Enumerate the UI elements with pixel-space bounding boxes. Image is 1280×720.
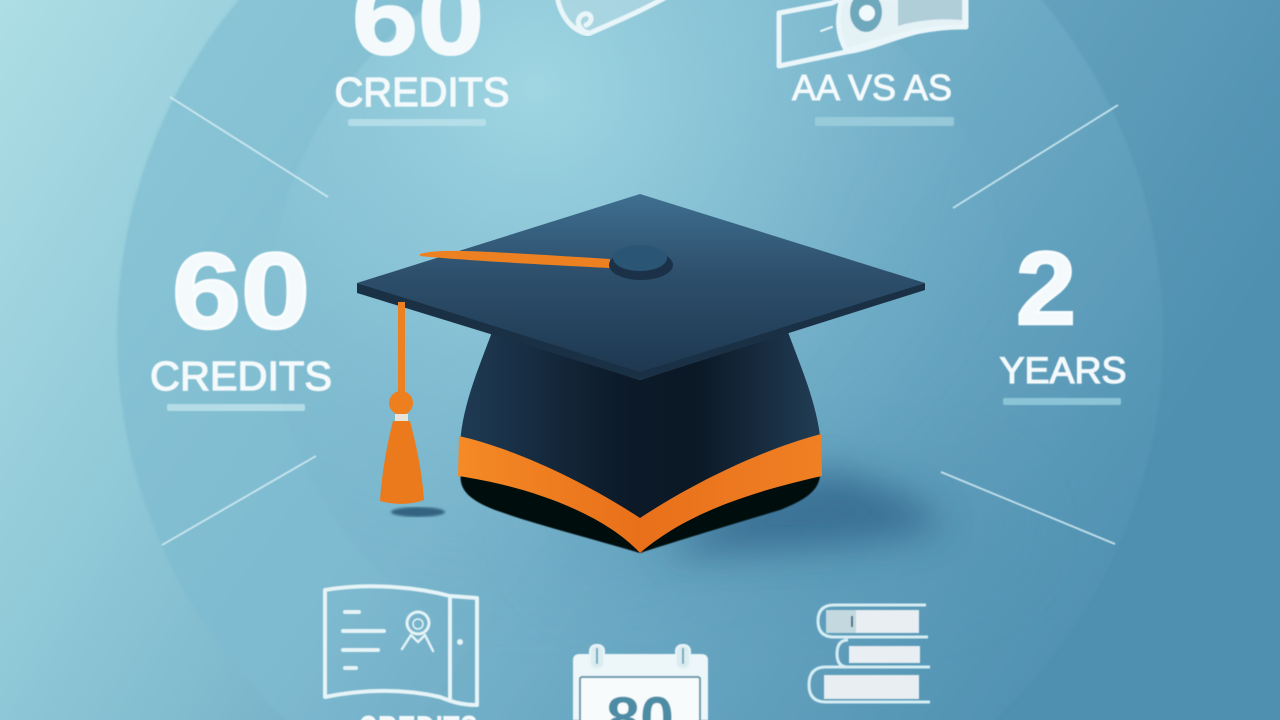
icon: certificate	[325, 586, 477, 705]
stat: 2 years: 2	[1016, 231, 1076, 347]
icon: scroll	[557, 0, 668, 34]
stat: 2 years	[1000, 231, 1126, 405]
stat: left 60 credits	[150, 230, 332, 411]
stat: top 60 credits: CREDITS	[334, 69, 510, 115]
stat: left 60 credits: 60	[172, 230, 310, 351]
cord on board	[420, 251, 610, 268]
cap underside	[461, 470, 820, 553]
tassel	[380, 302, 424, 504]
stat: left 60 credits: CREDITS	[150, 353, 332, 399]
inner glow circle	[270, 0, 1010, 680]
cap body	[460, 332, 821, 522]
board button	[609, 250, 673, 280]
tassel shadow	[391, 507, 445, 517]
stat: AA vs AS	[792, 67, 954, 126]
graduation cap illustration	[357, 194, 945, 553]
lower shading	[550, 470, 1010, 590]
radial divider lines	[162, 97, 1118, 545]
icon: calendar	[573, 645, 708, 720]
stat: AA vs AS: AA VS AS	[792, 67, 952, 108]
cap ground shadow	[660, 470, 945, 553]
orange band	[458, 434, 822, 553]
icon: stack of books	[809, 605, 930, 702]
icon: diploma	[779, 0, 966, 66]
stat: top 60 credits	[334, 0, 510, 126]
mortarboard edge	[357, 283, 925, 380]
mortarboard top	[357, 194, 925, 372]
stat: 2 years: YEARS	[1000, 350, 1126, 391]
